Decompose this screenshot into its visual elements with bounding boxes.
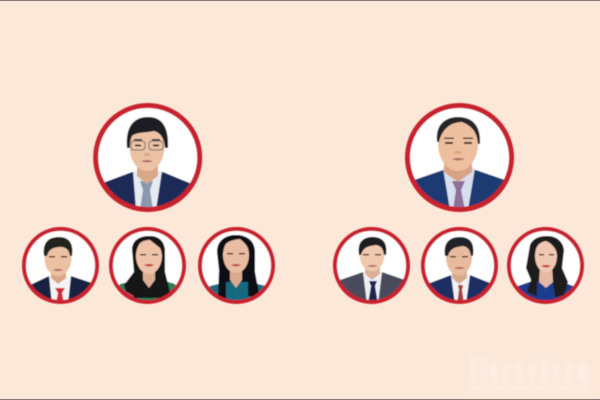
watermark (468, 356, 590, 391)
top edge line (0, 0, 600, 1)
portrait: large left (95, 106, 200, 210)
portrait: large right (405, 106, 512, 210)
portrait: small right 1 (334, 229, 410, 305)
portrait: small left 1 (24, 229, 98, 305)
bottom edge line (0, 399, 600, 400)
portrait: small right 2 (423, 229, 496, 305)
portrait: small left 3 (200, 229, 273, 305)
portrait: small right 3 (509, 229, 582, 305)
portrait: small left 2 (111, 229, 184, 305)
